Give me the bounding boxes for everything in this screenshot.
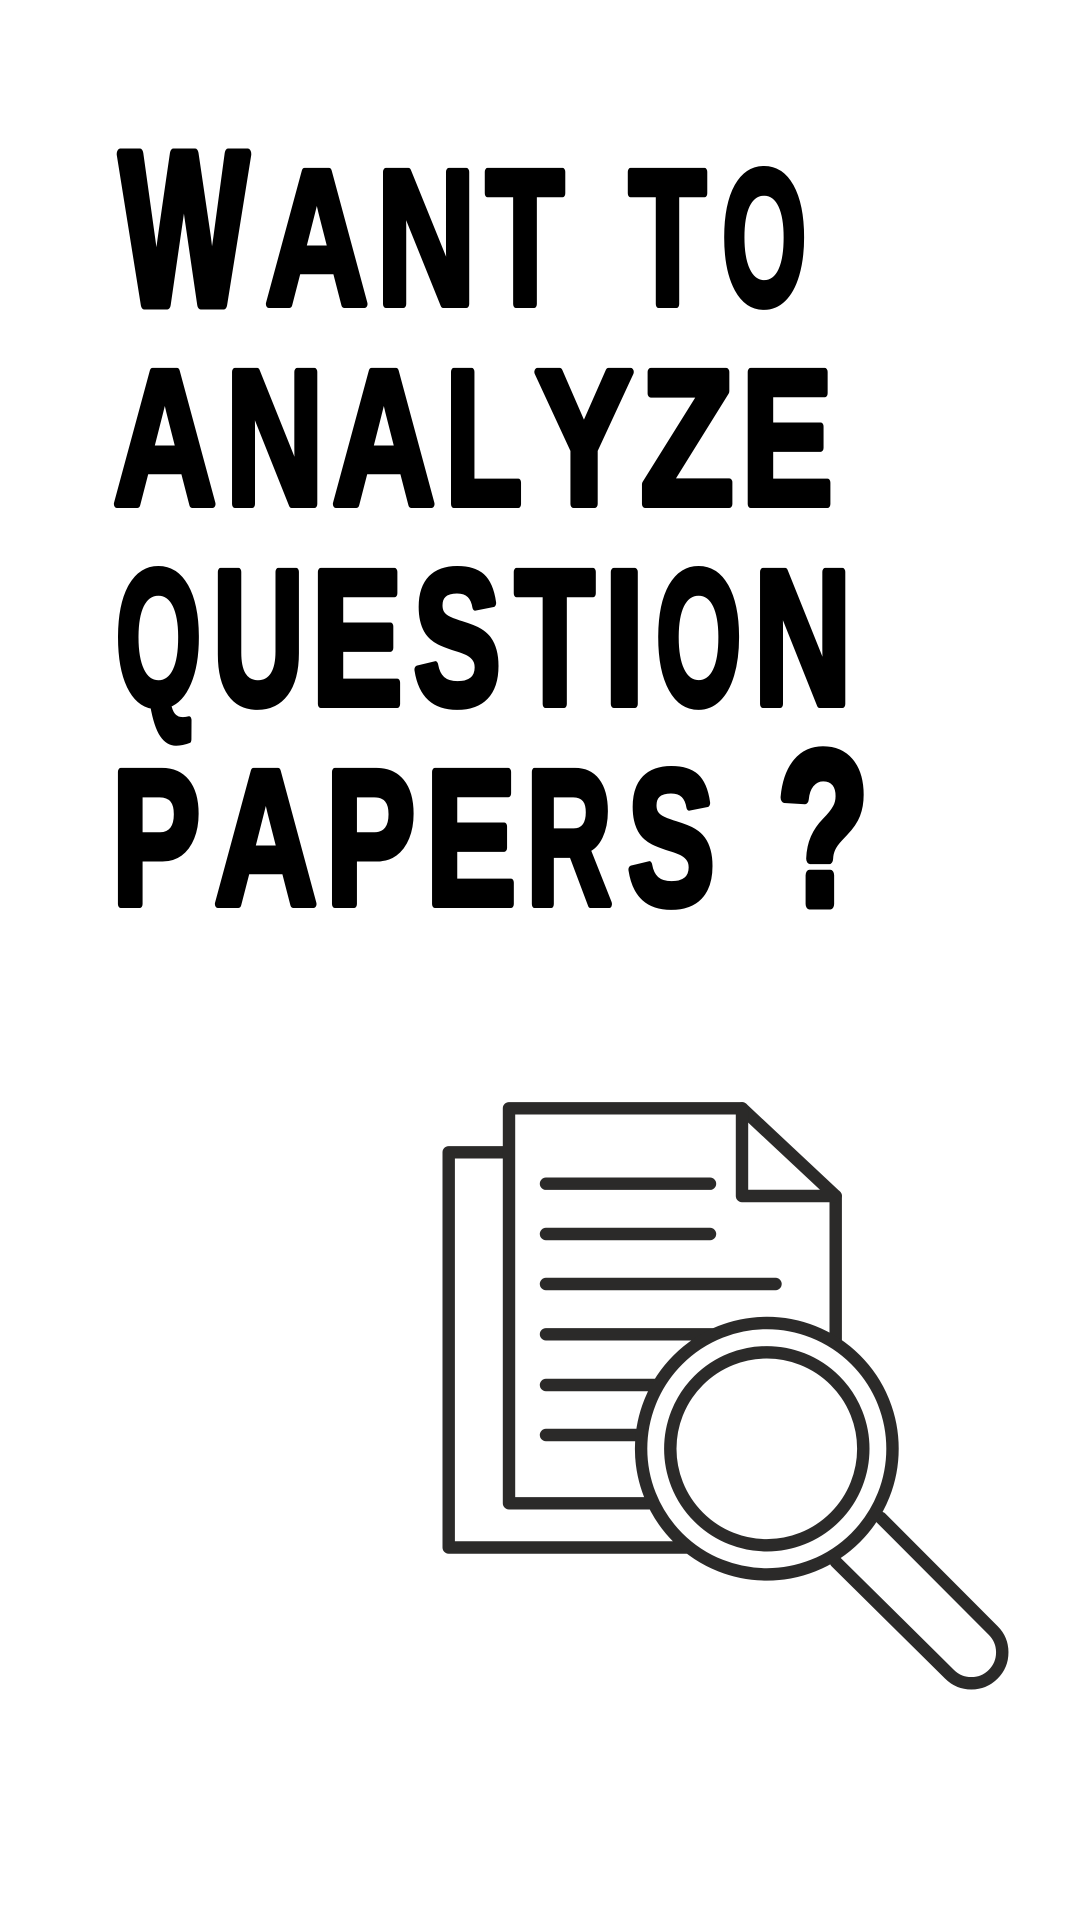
title line 3: U (213, 530, 304, 745)
icon: documents under magnifying glass (449, 1108, 1002, 1683)
title line 1: T (629, 130, 706, 345)
icon: text lines (546, 1184, 776, 1435)
title line 3: E (312, 530, 403, 745)
title line 2: E (741, 330, 833, 545)
title line 1: A (265, 130, 368, 345)
title line 4: A (214, 730, 317, 945)
icon: front page (509, 1108, 836, 1503)
icon: magnifier handle (836, 1518, 1002, 1683)
icon: back page (449, 1152, 700, 1548)
title line 4: P (112, 730, 200, 945)
title line 4: E (426, 730, 516, 945)
title line 3: Q (116, 530, 201, 745)
title line 3: S (413, 530, 501, 745)
title line 4: S (627, 730, 715, 945)
title line 4: P (326, 730, 415, 945)
title line 2: Z (641, 330, 734, 545)
title line 2: L (445, 330, 522, 545)
title line 1: N (377, 130, 476, 345)
title line 3: I (604, 530, 644, 745)
title line 1: W (120, 108, 248, 351)
icon: magnifier lens (670, 1352, 863, 1545)
title (112, 108, 869, 951)
title line 1: O (722, 130, 806, 345)
title line 4: R (526, 730, 612, 945)
icon: magnifier outer ring (641, 1323, 892, 1574)
title line 3: N (754, 530, 852, 745)
title line 1: T (486, 130, 564, 345)
title line 3: T (515, 530, 594, 745)
title line 4: ? (778, 708, 868, 951)
title line 2: A (113, 330, 216, 545)
title line 2: A (332, 330, 435, 545)
title line 2: Y (535, 330, 633, 545)
title line 3: O (656, 530, 741, 745)
icon: page fold (742, 1108, 836, 1196)
title line 2: N (226, 330, 324, 545)
